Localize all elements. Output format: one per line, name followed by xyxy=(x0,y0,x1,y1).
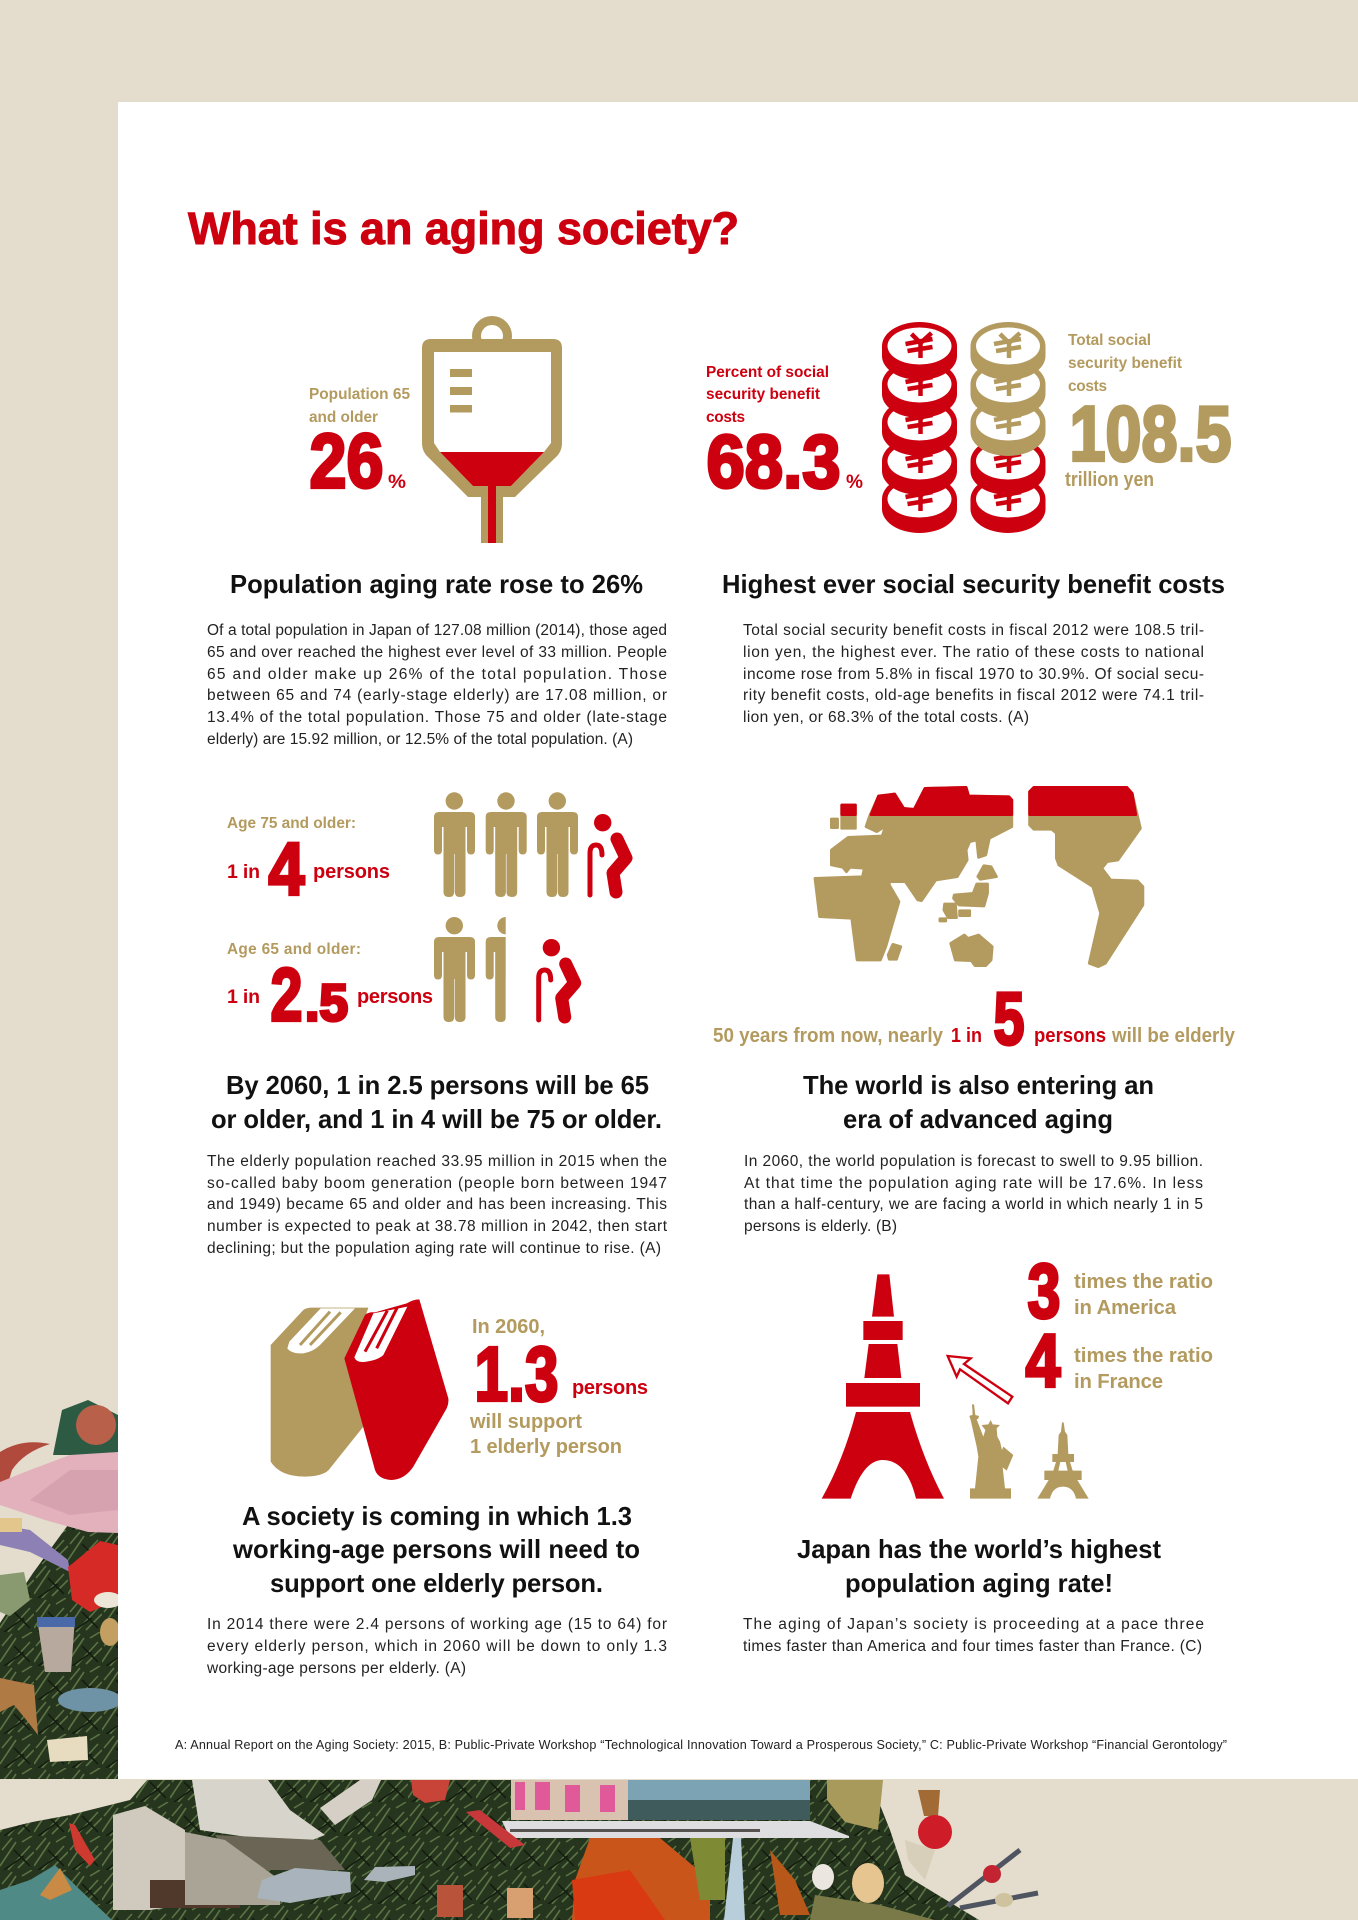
stat: 1 in 4 persons: Age 75 and older: xyxy=(227,815,356,832)
body text: number is expected to peak at 38.78 million in 2042, then start xyxy=(207,1218,668,1235)
panel: world aging xyxy=(713,787,1236,1235)
body text: between 65 and 74 (early-stage elderly) are 17.08 million, or xyxy=(207,687,667,704)
stat: 1 in 2.5 persons: 1 in xyxy=(227,986,260,1008)
label: total social security benefit costs: Total social xyxy=(1068,332,1151,349)
stat: 1 in 4 persons: 4 xyxy=(268,828,304,910)
heading: era of advanced aging xyxy=(843,1106,1113,1134)
body text: times faster than America and four times faster than France. (C) xyxy=(743,1638,1202,1655)
title: What is an aging society? xyxy=(188,203,739,254)
icon: Tokyo Tower xyxy=(822,1274,944,1499)
body text: 65 and older make up 26% of the total population. Those xyxy=(207,666,667,683)
red ornament xyxy=(466,1810,525,1848)
body text xyxy=(207,1153,668,1257)
stat: 1 in 2.5 persons: persons xyxy=(357,986,433,1008)
stat: 3 times the ratio in America: 3 xyxy=(1028,1248,1060,1334)
stat: 1.3 persons will support 1 elderly person: In 2060, xyxy=(472,1316,545,1338)
waterfall xyxy=(724,1838,745,1920)
autumn leaves xyxy=(572,1838,710,1920)
stat: 1.3 persons will support 1 elderly person: 1 elderly person xyxy=(470,1436,622,1458)
body text: persons is elderly. (B) xyxy=(744,1218,897,1235)
arrow xyxy=(948,1356,1012,1403)
stat: 3 times the ratio in America: times the ratio xyxy=(1074,1271,1213,1293)
swimmer and koi xyxy=(0,1865,112,1920)
label: population 65 and older xyxy=(309,386,410,426)
body text xyxy=(743,1616,1204,1655)
panel: population aging rate xyxy=(207,320,667,748)
body text: elderly) are 15.92 million, or 12.5% of the total population. (A) xyxy=(207,731,633,748)
stat: 26%: 26 xyxy=(310,418,384,504)
heading: or older, and 1 in 4 will be 75 or older. xyxy=(211,1106,662,1134)
label: total social security benefit costs: costs xyxy=(1068,378,1107,395)
stat: 1 in 2.5 persons: 2 xyxy=(270,952,302,1036)
stat: 4 times the ratio in France: in France xyxy=(1074,1371,1163,1393)
label: percent of social security benefit costs: Percent of social xyxy=(706,364,829,381)
icon: IV bag xyxy=(422,320,562,543)
icon: people row 75 and older xyxy=(434,792,626,897)
body text: lion yen, or 68.3% of the total costs. (A) xyxy=(743,709,1029,726)
panel: social security benefit costs: % xyxy=(846,472,863,493)
body text: every elderly person, which in 2060 will be down to only 1.3 xyxy=(207,1638,667,1655)
heading: A society is coming in which 1.3 xyxy=(242,1503,632,1531)
stat: 1 in 4 persons: 1 in xyxy=(227,861,260,883)
body text: In 2060, the world population is forecast to swell to 9.95 billion. xyxy=(744,1153,1203,1170)
label: percent of social security benefit costs: costs xyxy=(706,409,745,426)
collage: Japanese scenery along bottom edge xyxy=(0,1779,1038,1920)
body text: working-age persons per elderly. (A) xyxy=(206,1660,466,1677)
stat: 108.5 trillion yen: 108.5 xyxy=(1070,390,1232,478)
stat: 4 times the ratio in France xyxy=(1026,1318,1213,1402)
stat: 3 times the ratio in America: in America xyxy=(1074,1297,1177,1319)
icon: coin stacks xyxy=(882,322,1046,533)
stat: 1.3 persons will support 1 elderly person: will support xyxy=(469,1411,582,1433)
icon: Eiffel Tower xyxy=(1037,1422,1089,1499)
body text xyxy=(207,622,667,748)
tile xyxy=(47,1736,88,1762)
label: percent of social security benefit costs: security benefit xyxy=(706,386,820,403)
panel: working-age support xyxy=(206,1299,667,1677)
heading: Population aging rate rose to 26% xyxy=(230,571,643,599)
body text: Total social security benefit costs in fiscal 2012 were 108.5 tril- xyxy=(743,622,1204,639)
body text: The aging of Japan’s society is proceeding at a pace three xyxy=(743,1616,1204,1633)
icon: books xyxy=(271,1299,448,1480)
heading: The world is also entering an xyxy=(803,1072,1154,1100)
label: total social security benefit costs: security benefit xyxy=(1068,355,1182,372)
stat: 1 in 4 persons xyxy=(227,815,390,910)
stat: 1 in 4 persons: persons xyxy=(313,861,390,883)
teapot xyxy=(58,1688,122,1712)
label: population 65 and older: and older xyxy=(309,409,378,426)
stat: 1 in 5 persons will be elderly xyxy=(713,978,1236,1060)
heading xyxy=(797,1536,1161,1598)
body text: 13.4% of the total population. Those 75 and older (late-stage xyxy=(207,709,667,726)
heading: population aging rate! xyxy=(845,1570,1113,1598)
body text: 65 and over reached the highest ever level of 33 million. People xyxy=(207,644,667,661)
heading: support one elderly person. xyxy=(270,1570,603,1598)
body text: The elderly population reached 33.95 million in 2015 when the xyxy=(207,1153,667,1170)
stat: 1 in 5 persons will be elderly: 50 years from now, nearly xyxy=(713,1025,944,1047)
body text xyxy=(744,1153,1203,1235)
heading: Highest ever social security benefit costs xyxy=(722,571,1225,599)
blossoms xyxy=(0,1452,118,1533)
fan xyxy=(0,1442,50,1483)
stat: 1.3 persons will support 1 elderly person: persons xyxy=(572,1377,648,1399)
body text: At that time the population aging rate will be 17.6%. In less xyxy=(744,1175,1203,1192)
heading xyxy=(803,1072,1154,1134)
heading: working-age persons will need to xyxy=(232,1536,640,1564)
body text: Of a total population in Japan of 127.08 million (2014), those aged xyxy=(207,622,667,639)
masks xyxy=(812,1864,834,1890)
stat: 1 in 2.5 persons: .5 xyxy=(305,974,348,1032)
street houses xyxy=(113,1806,185,1910)
label: percent of social security benefit costs xyxy=(706,364,829,426)
cup xyxy=(37,1618,75,1672)
heading: By 2060, 1 in 2.5 persons will be 65 xyxy=(226,1072,649,1100)
icon: world map xyxy=(815,787,1143,967)
white content panel xyxy=(118,102,1358,1779)
stat: 4 times the ratio in France: times the ratio xyxy=(1074,1345,1213,1367)
dancers and city xyxy=(511,1780,628,1820)
heading xyxy=(232,1503,640,1598)
heading: Japan has the world’s highest xyxy=(797,1536,1161,1564)
ornaments xyxy=(320,1780,381,1825)
body text xyxy=(743,622,1204,726)
stat: 1.3 persons will support 1 elderly person xyxy=(469,1316,648,1458)
panel: social security benefit costs: trillion yen xyxy=(1065,469,1154,491)
panel: 1 in 2.5 persons xyxy=(207,792,668,1257)
stat: 1 in 5 persons will be elderly: persons xyxy=(1034,1025,1106,1047)
body text xyxy=(206,1616,667,1677)
gold frame xyxy=(827,1780,883,1830)
body text: declining; but the population aging rate will continue to rise. (A) xyxy=(207,1240,661,1257)
panel: population aging rate: % xyxy=(388,472,406,493)
icon: Statue of Liberty xyxy=(969,1404,1013,1499)
stat: 1.3 persons will support 1 elderly person: 1.3 xyxy=(474,1332,558,1418)
bullet train xyxy=(502,1821,849,1838)
red mask xyxy=(68,1541,118,1612)
castle xyxy=(192,1780,325,1845)
label: total social security benefit costs xyxy=(1068,332,1182,395)
stat: 3 times the ratio in America xyxy=(1028,1248,1213,1334)
stat: 1 in 5 persons will be elderly: will be elderly xyxy=(1111,1025,1236,1047)
cars xyxy=(257,1868,351,1903)
body text: income rose from 5.8% in fiscal 1970 to 30.9%. Of social secu- xyxy=(743,666,1204,683)
bird and red ball xyxy=(918,1790,940,1816)
lion mask xyxy=(53,1400,118,1455)
collage: Japanese scenery on left edge xyxy=(0,1400,122,1779)
stat: 1 in 5 persons will be elderly: 1 in xyxy=(951,1025,982,1047)
stat: 1 in 2.5 persons xyxy=(227,941,433,1036)
stat: 1 in 2.5 persons: Age 65 and older: xyxy=(227,941,361,958)
footnote: A: Annual Report on the Aging Society: 2015, B: Public-Private Workshop “Technological Innovation Toward a Prosperous Society,” C: Public-Private Workshop “Financial Gerontology” xyxy=(175,1738,1227,1752)
heading xyxy=(211,1072,662,1134)
stat: 4 times the ratio in France: 4 xyxy=(1026,1318,1061,1402)
stat: 1 in 5 persons will be elderly: 5 xyxy=(994,978,1024,1060)
body text: so-called baby boom generation (people born between 1947 xyxy=(207,1175,667,1192)
icon: people row 65 and older xyxy=(434,917,575,1022)
stat: 68.3%: 68.3 xyxy=(706,420,840,504)
label: population 65 and older: Population 65 xyxy=(309,386,410,403)
panel: highest aging rate xyxy=(743,1248,1213,1655)
panel: social security benefit costs xyxy=(706,322,1232,726)
body text: In 2014 there were 2.4 persons of working age (15 to 64) for xyxy=(207,1616,667,1633)
dog xyxy=(0,1678,38,1735)
body text: rity benefit costs, old-age benefits in fiscal 2012 were 74.1 tril- xyxy=(743,687,1204,704)
body text: lion yen, the highest ever. The ratio of these costs to national xyxy=(743,644,1204,661)
body text: than a half-century, we are facing a world in which nearly 1 in 5 xyxy=(744,1196,1203,1213)
body text: and 1949) became 65 and older and has been increasing. This xyxy=(207,1196,667,1213)
